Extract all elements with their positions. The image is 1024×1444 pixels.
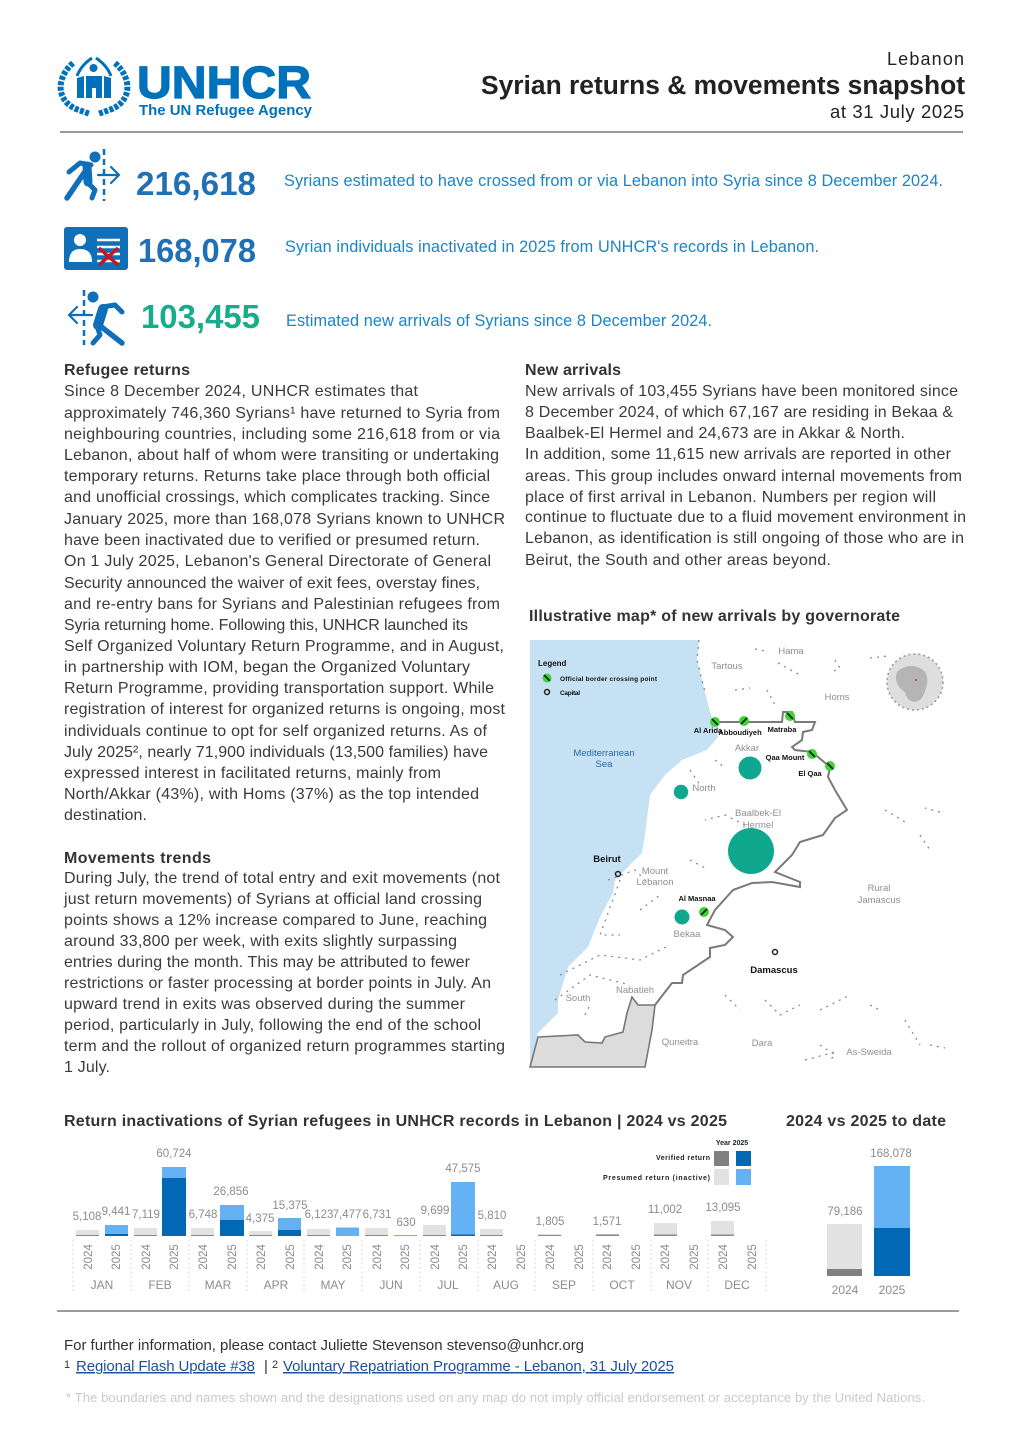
title block: Lebanon <box>887 49 964 69</box>
logo: UNHCR <box>61 57 313 119</box>
map place labels: South <box>566 993 590 1004</box>
circle: North <box>674 785 688 799</box>
year labels: 2025 <box>516 1244 528 1270</box>
map place labels: Homs <box>825 692 850 703</box>
capital markers <box>544 690 778 954</box>
icon: UNHCR laurel, hands and family <box>61 58 127 114</box>
value labels: 47,575 <box>445 1163 481 1175</box>
value labels: 15,375 <box>272 1200 308 1212</box>
text block: refugee returns: expressed interest in facilitated returns, mainly from <box>64 765 441 782</box>
occupied territory area <box>530 997 655 1067</box>
stat: crossed into Syria <box>67 149 943 202</box>
map legend: Capital <box>560 690 580 697</box>
footer: references: 1 <box>64 1359 70 1371</box>
month labels: APR <box>264 1278 289 1292</box>
month labels: DEC <box>724 1278 750 1292</box>
year labels: 2025 <box>747 1244 759 1270</box>
text block: movements trends: restrictions or faster processing at border points in July. An <box>64 975 491 992</box>
text block: movements trends: Movements trends <box>64 850 211 867</box>
text block: refugee returns: neighbouring countries, including some 216,618 from or via <box>64 426 500 443</box>
map place labels: As-Sweida <box>846 1047 892 1058</box>
tagline: The UN Refugee Agency <box>139 102 313 119</box>
Lebanon border <box>655 712 847 1005</box>
map place labels: Mount <box>642 866 669 877</box>
text block: refugee returns: Syria returning home. Following this, UNHCR launched its <box>64 617 468 634</box>
text block: refugee returns: Security announced the waiver of exit fees, overstay fines, <box>64 575 480 592</box>
value labels: 6,731 <box>363 1209 391 1221</box>
map place labels: Al Masnaa <box>678 894 716 903</box>
year labels <box>83 1244 759 1270</box>
footer: disclaimer: * The boundaries and names shown and the designations used on any map do not imply official endorsement or acceptance by the United Nations. <box>66 1390 925 1405</box>
circle: Bekaa <box>674 910 690 924</box>
map legend: Legend <box>538 659 567 668</box>
text block: refugee returns: North/Akkar (43%), with Homs (37%) as the top intended <box>64 786 479 803</box>
year labels: 2024 <box>83 1244 95 1270</box>
year labels: 2025 <box>111 1244 123 1270</box>
text block: refugee returns: and unofficial crossings, which complicates tracking. Since <box>64 489 490 506</box>
text block: movements trends: points shows a 12% increase compared to June, reaching <box>64 912 487 929</box>
locator globe <box>887 654 943 710</box>
text block: new arrivals: place of first arrival in Lebanon. Numbers per region will <box>525 489 936 506</box>
footer: references <box>64 1358 674 1375</box>
text block: new arrivals: continue to fluctuate due to a fluid movement environment in <box>525 509 966 526</box>
year labels: 2024 <box>256 1244 268 1270</box>
value labels: 5,810 <box>478 1210 506 1222</box>
map place labels: Abboudiyeh <box>718 728 762 737</box>
year labels: 2025 <box>342 1244 354 1270</box>
sea <box>530 640 718 1067</box>
month labels: OCT <box>609 1278 635 1292</box>
stat: inactivated records <box>64 227 819 270</box>
text block: new arrivals: Lebanon, as identification is still ongoing of those who are in <box>525 530 964 547</box>
value labels: 7,477 <box>333 1209 361 1221</box>
year labels: 2024 <box>198 1244 210 1270</box>
text block: refugee returns: On 1 July 2025, Lebanon's General Directorate of General <box>64 553 491 570</box>
text block: new arrivals: New arrivals <box>525 362 621 379</box>
description: Syrian individuals inactivated in 2025 from UNHCR's records in Lebanon. <box>285 238 819 256</box>
chart title: to date: 2024 vs 2025 to date <box>786 1113 946 1130</box>
text block: movements trends: upward trend in exits was observed during the summer <box>64 996 466 1013</box>
text block: new arrivals: New arrivals of 103,455 Syrians have been monitored since <box>525 383 958 400</box>
text block: refugee returns <box>64 362 506 824</box>
chart legend <box>603 1140 751 1185</box>
bar chart: 2024 vs 2025 to date: 79,186 <box>827 1206 863 1218</box>
circle: Akkar <box>738 756 762 780</box>
bar chart: 2024 vs 2025 to date: 2024 <box>832 1283 859 1297</box>
text block: refugee returns: temporary returns. Returns take place through both official <box>64 468 490 485</box>
bar chart: 2024 vs 2025 to date: 2025 <box>879 1283 906 1297</box>
bars 2025 presumed <box>105 1167 475 1236</box>
text block: refugee returns: Lebanon, about half of whom were transiting or undertaking <box>64 447 499 464</box>
bar chart: 2024 vs 2025 to date <box>827 1148 912 1297</box>
map place labels: Al Arida <box>694 726 723 735</box>
map place labels: Lebanon <box>637 877 673 888</box>
text block: movements trends: around 33,800 per week, with exits slightly surpassing <box>64 933 457 950</box>
wordmark: UNHCR <box>137 57 311 108</box>
text block: refugee returns: Return Programme, providing transportation support. While <box>64 680 494 697</box>
icon: ID card with red cross <box>64 227 128 270</box>
description: Estimated new arrivals of Syrians since 8 December 2024. <box>286 312 712 330</box>
separators <box>73 1240 766 1294</box>
month labels: JUL <box>437 1278 459 1292</box>
text block: new arrivals: In addition, some 11,615 new arrivals are reported in other <box>525 446 952 463</box>
text block: refugee returns: Self Organized Voluntary Return Programme, and in August, <box>64 638 504 655</box>
map place labels: Akkar <box>735 743 759 754</box>
bars 2024 verified <box>76 1234 734 1236</box>
map place labels: Nabatieh <box>616 985 654 996</box>
year labels: 2025 <box>458 1244 470 1270</box>
admin boundaries (dotted) <box>555 640 945 1060</box>
chart legend: Presumed return (inactive) <box>603 1175 710 1182</box>
year labels: 2024 <box>372 1244 384 1270</box>
map: new arrivals by governorate <box>530 640 945 1067</box>
text block: new arrivals: 8 December 2024, of which 67,167 are residing in Bekaa & <box>525 404 953 421</box>
map place labels: Quneitra <box>662 1037 699 1048</box>
value labels: 11,002 <box>648 1204 682 1216</box>
map place labels: Qaa Mount <box>766 753 805 762</box>
value labels: 9,699 <box>421 1205 449 1217</box>
title block: Syrian returns & movements snapshot <box>481 72 966 100</box>
map place labels: El Qaa <box>798 769 822 778</box>
year labels: 2024 <box>718 1244 730 1270</box>
text block: movements trends: period, particularly in July, following the end of the school <box>64 1017 481 1034</box>
year labels: 2025 <box>631 1244 643 1270</box>
map heading: Illustrative map* of new arrivals by governorate <box>529 608 900 625</box>
year labels: 2025 <box>169 1244 181 1270</box>
text block: movements trends: 1 July. <box>64 1059 110 1076</box>
map place labels: Tartous <box>711 661 743 672</box>
month labels <box>91 1278 750 1292</box>
border crossing markers <box>542 674 835 917</box>
value labels: 13,095 <box>705 1202 741 1214</box>
year labels: 2025 <box>574 1244 586 1270</box>
text block: new arrivals <box>525 362 966 569</box>
map place labels: Rural <box>868 883 890 894</box>
year labels: 2025 <box>285 1244 297 1270</box>
map place labels: Hermel <box>743 820 773 831</box>
text block: new arrivals: Beirut, the South and other areas beyond. <box>525 552 831 569</box>
text block: movements trends: term and the rollout of organized return programmes starting <box>64 1038 505 1055</box>
chart legend: Verified return <box>656 1155 710 1162</box>
map place labels: Matraba <box>768 725 797 734</box>
stat: new arrivals <box>69 290 712 345</box>
bar chart: monthly inactivations <box>73 1140 766 1294</box>
month labels: AUG <box>493 1278 519 1292</box>
month labels: FEB <box>148 1278 172 1292</box>
description: Syrians estimated to have crossed from or via Lebanon into Syria since 8 December 2024. <box>284 172 943 190</box>
chart title: monthly: Return inactivations of Syrian refugees in UNHCR records in Lebanon | 2024 vs 2025 <box>64 1113 727 1130</box>
value labels: 4,375 <box>246 1213 274 1225</box>
bars 2024 presumed <box>76 1221 734 1236</box>
value labels: 5,108 <box>73 1211 101 1223</box>
year labels: 2024 <box>545 1244 557 1270</box>
title block <box>481 49 966 122</box>
month labels: JUN <box>379 1278 403 1292</box>
year labels: 2024 <box>314 1244 326 1270</box>
year labels: 2024 <box>660 1244 672 1270</box>
bars 2025 verified <box>105 1178 475 1236</box>
month labels: MAY <box>320 1278 346 1292</box>
circle: Baalbek-El Hermel <box>728 828 774 874</box>
year labels: 2025 <box>227 1244 239 1270</box>
value labels: 630 <box>396 1217 416 1229</box>
value: 168,078 <box>138 232 256 269</box>
value labels: 1,805 <box>536 1216 564 1228</box>
text block: movements trends: entries during the month. This may be attributed to fewer <box>64 954 471 971</box>
map place labels: Hama <box>778 646 804 657</box>
footer: contact: For further information, please contact Juliette Stevenson stevenso@unhcr.org <box>64 1337 584 1354</box>
map place labels: Dara <box>752 1038 773 1049</box>
text block: refugee returns: Refugee returns <box>64 362 190 379</box>
value labels <box>73 1148 741 1229</box>
text block: movements trends: just return movements) of Syrians at official land crossing <box>63 891 482 908</box>
year labels: 2024 <box>487 1244 499 1270</box>
map place labels: Bekaa <box>674 929 701 940</box>
map legend <box>538 659 658 697</box>
value labels: 1,571 <box>593 1216 621 1228</box>
value labels: 60,724 <box>156 1148 192 1160</box>
chart legend: Year 2025 <box>716 1140 748 1147</box>
title block: at 31 July 2025 <box>830 101 964 122</box>
text block: refugee returns: July 2025², nearly 71,900 individuals (13,500 families) have <box>64 744 488 761</box>
icon: person walking across border <box>67 149 119 201</box>
text block: refugee returns: Since 8 December 2024, UNHCR estimates that <box>64 383 419 400</box>
year labels: 2024 <box>141 1244 153 1270</box>
text block: refugee returns: destination. <box>64 807 147 824</box>
map place labels: Jamascus <box>858 895 901 906</box>
year labels: 2025 <box>400 1244 412 1270</box>
map place labels: Mediterranean <box>573 748 635 759</box>
footer: references: Regional Flash Update #38 <box>76 1358 255 1375</box>
map legend: Official border crossing point <box>560 676 658 683</box>
month labels: MAR <box>205 1278 232 1292</box>
text block: refugee returns: approximately 746,360 Syrians¹ have returned to Syria from <box>64 405 500 422</box>
month labels: NOV <box>666 1278 692 1292</box>
footer: references: 2 <box>272 1359 278 1371</box>
value: 103,455 <box>141 298 260 335</box>
map place labels: Damascus <box>750 965 798 976</box>
map place labels: Beirut <box>593 854 622 865</box>
text block: refugee returns: individuals continue to opt for self organized returns. As of <box>64 723 488 740</box>
footer: references: | <box>264 1358 268 1375</box>
icon: person arriving across border <box>69 290 122 345</box>
value: 216,618 <box>136 165 256 202</box>
text block: new arrivals: Baalbek-El Hermel and 24,673 are in Akkar & North. <box>525 425 905 442</box>
month labels: JAN <box>91 1278 113 1292</box>
map place labels <box>566 646 901 1058</box>
text block: refugee returns: have been inactivated due to verified or presumed return. <box>64 532 480 549</box>
footer: references: Voluntary Repatriation Programme - Lebanon, 31 July 2025 <box>283 1358 674 1375</box>
bar chart: 2024 vs 2025 to date: 168,078 <box>870 1148 912 1160</box>
text block: movements trends: During July, the trend of total entry and exit movements (not <box>64 870 501 887</box>
text block: refugee returns: registration of interest for organized returns is ongoing, most <box>64 701 506 718</box>
map place labels: Baalbek-El <box>735 808 781 819</box>
month labels: SEP <box>552 1278 576 1292</box>
text block: new arrivals: areas. This group includes onward internal movements from <box>525 468 962 485</box>
value labels: 26,856 <box>213 1186 249 1198</box>
text block: refugee returns: January 2025, more than 168,078 Syrians known to UNHCR <box>64 511 505 528</box>
value labels: 7,119 <box>132 1209 160 1221</box>
text block: refugee returns: in partnership with IOM, began the Organized Voluntary <box>64 659 470 676</box>
year labels: 2024 <box>430 1244 442 1270</box>
map place labels: Sea <box>596 759 613 770</box>
value labels: 9,441 <box>102 1206 130 1218</box>
year labels: 2025 <box>689 1244 701 1270</box>
value labels: 6,123 <box>305 1209 333 1221</box>
text block: movements trends <box>63 850 505 1076</box>
year labels: 2024 <box>602 1244 614 1270</box>
text block: refugee returns: and re-entry bans for Syrians and Palestinian refugees from <box>64 596 500 613</box>
map place labels: North <box>692 783 716 794</box>
value labels: 6,748 <box>189 1209 217 1221</box>
